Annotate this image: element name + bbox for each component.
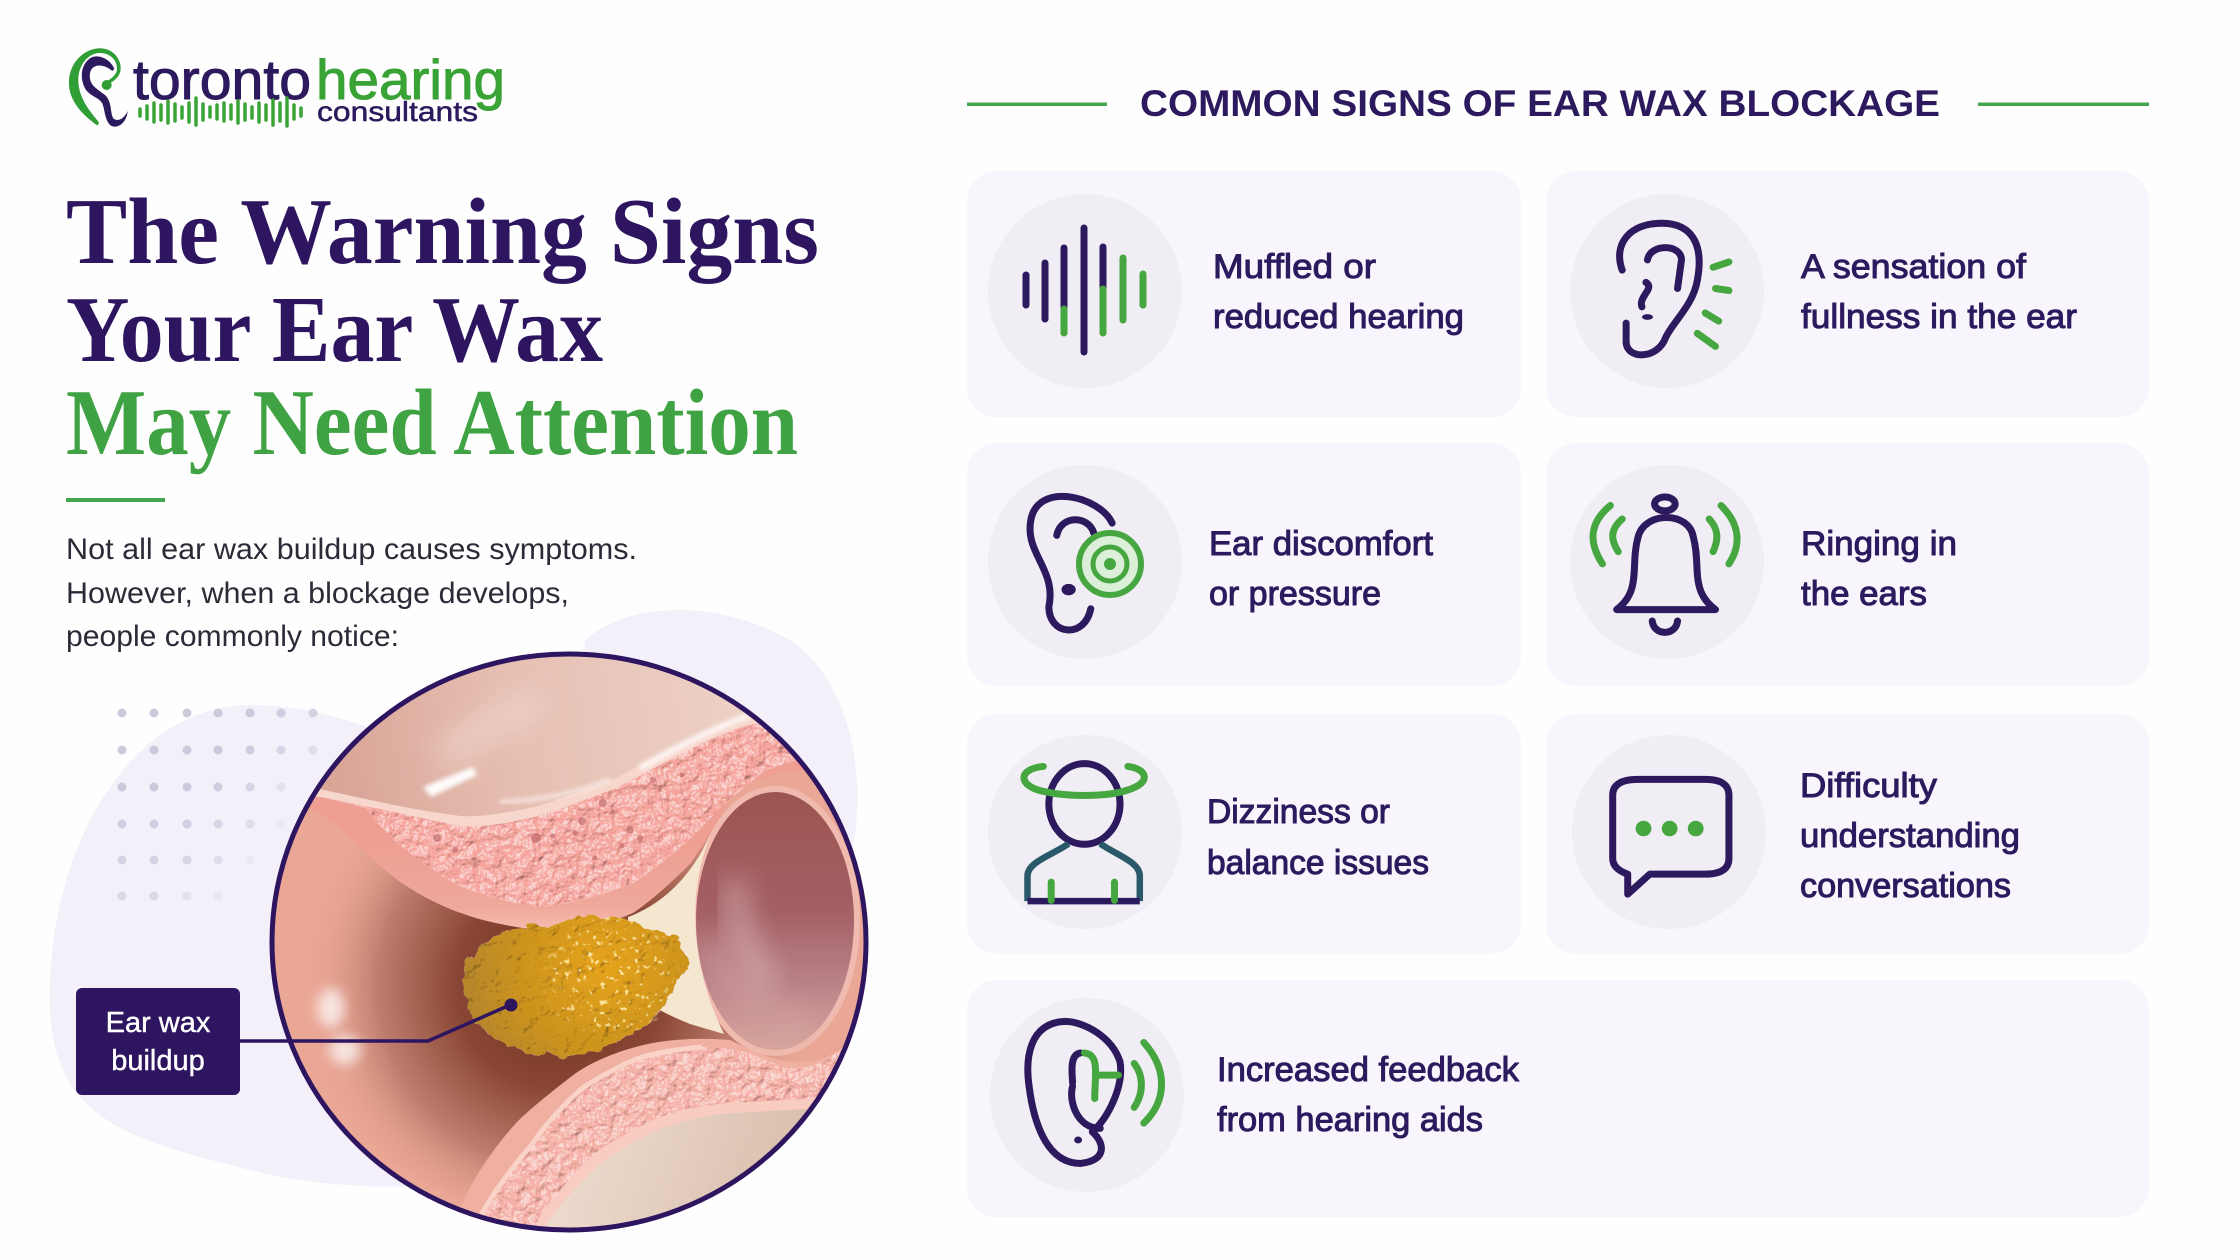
section heading	[967, 83, 2149, 124]
icon: speech bubble	[1613, 779, 1729, 894]
title: May Need Attention	[66, 371, 798, 475]
logo: hearing	[316, 48, 505, 111]
card: ringing: the ears	[1801, 575, 1927, 613]
card: hearing aid feedback: Increased feedback	[1217, 1051, 1520, 1089]
card: hearing aid feedback	[967, 980, 2149, 1217]
card: fullness sensation: A sensation of	[1801, 248, 2027, 286]
card: dizziness: Dizziness or	[1207, 793, 1390, 831]
card: muffled hearing: reduced hearing	[1213, 298, 1464, 336]
intro text	[66, 533, 637, 653]
top highlight	[423, 767, 477, 797]
upper wall	[366, 812, 720, 928]
intro text: people commonly notice:	[66, 620, 399, 653]
icon: person with spinning halo	[1024, 764, 1144, 901]
callout pointer dot	[504, 998, 518, 1012]
illustration outline	[272, 654, 866, 1230]
left wall highlight	[317, 988, 361, 1065]
icon: sound wave	[1026, 228, 1143, 352]
logo wordmark: toronto	[133, 48, 311, 111]
card: muffled hearing	[967, 171, 1521, 417]
tissue pores	[433, 772, 684, 860]
callout: ear wax buildup	[76, 988, 518, 1095]
logo sound wave	[140, 98, 301, 126]
wall sheens	[640, 715, 750, 768]
icon: ear with pressure target	[1030, 496, 1141, 630]
card: conversations: conversations	[1800, 867, 2011, 905]
wax lump	[463, 917, 688, 1055]
card: conversations: Difficulty	[1800, 767, 1937, 805]
card: dizziness	[967, 714, 1521, 954]
canal opening	[693, 789, 857, 1053]
lower wall	[461, 1038, 842, 1214]
illustration: ear canal with wax blockage	[260, 630, 880, 1240]
intro text: However, when a blockage develops,	[66, 577, 569, 610]
card: ringing	[1546, 443, 2149, 686]
logo: consultants	[317, 96, 478, 127]
section heading: COMMON SIGNS OF EAR WAX BLOCKAGE	[1140, 83, 1940, 124]
card: conversations: understanding	[1800, 817, 2020, 855]
card: ear discomfort: or pressure	[1209, 575, 1381, 613]
dot pattern	[118, 708, 318, 900]
intro text: Not all ear wax buildup causes symptoms.	[66, 533, 637, 566]
icon: ear with rays	[1620, 223, 1729, 355]
title: The Warning Signs	[66, 180, 819, 284]
card: muffled hearing: Muffled or	[1213, 248, 1376, 286]
title	[66, 180, 819, 475]
lavender background blobs	[50, 610, 858, 1187]
card: fullness sensation	[1546, 171, 2149, 417]
icon: ringing bell	[1593, 497, 1737, 632]
card: ringing: Ringing in	[1801, 525, 1957, 563]
callout: ear wax buildup: Ear wax	[106, 1007, 211, 1039]
icon: ear logo mark	[69, 48, 128, 127]
card: conversations	[1546, 714, 2149, 954]
wax glints	[538, 915, 682, 1035]
cream membrane	[625, 832, 724, 1034]
title: Your Ear Wax	[66, 278, 603, 382]
title divider	[66, 498, 165, 502]
card: hearing aid feedback: from hearing aids	[1217, 1101, 1483, 1139]
card: dizziness: balance issues	[1207, 844, 1429, 882]
icon: ear with hearing aid	[1028, 1021, 1162, 1163]
card: ear discomfort	[967, 443, 1521, 686]
canal base	[274, 770, 864, 1208]
callout leader line	[238, 1005, 510, 1041]
card: fullness sensation: fullness in the ear	[1801, 298, 2077, 336]
callout box	[76, 988, 240, 1095]
logo	[69, 48, 505, 127]
callout: ear wax buildup: buildup	[111, 1045, 205, 1077]
card: ear discomfort: Ear discomfort	[1209, 525, 1434, 563]
